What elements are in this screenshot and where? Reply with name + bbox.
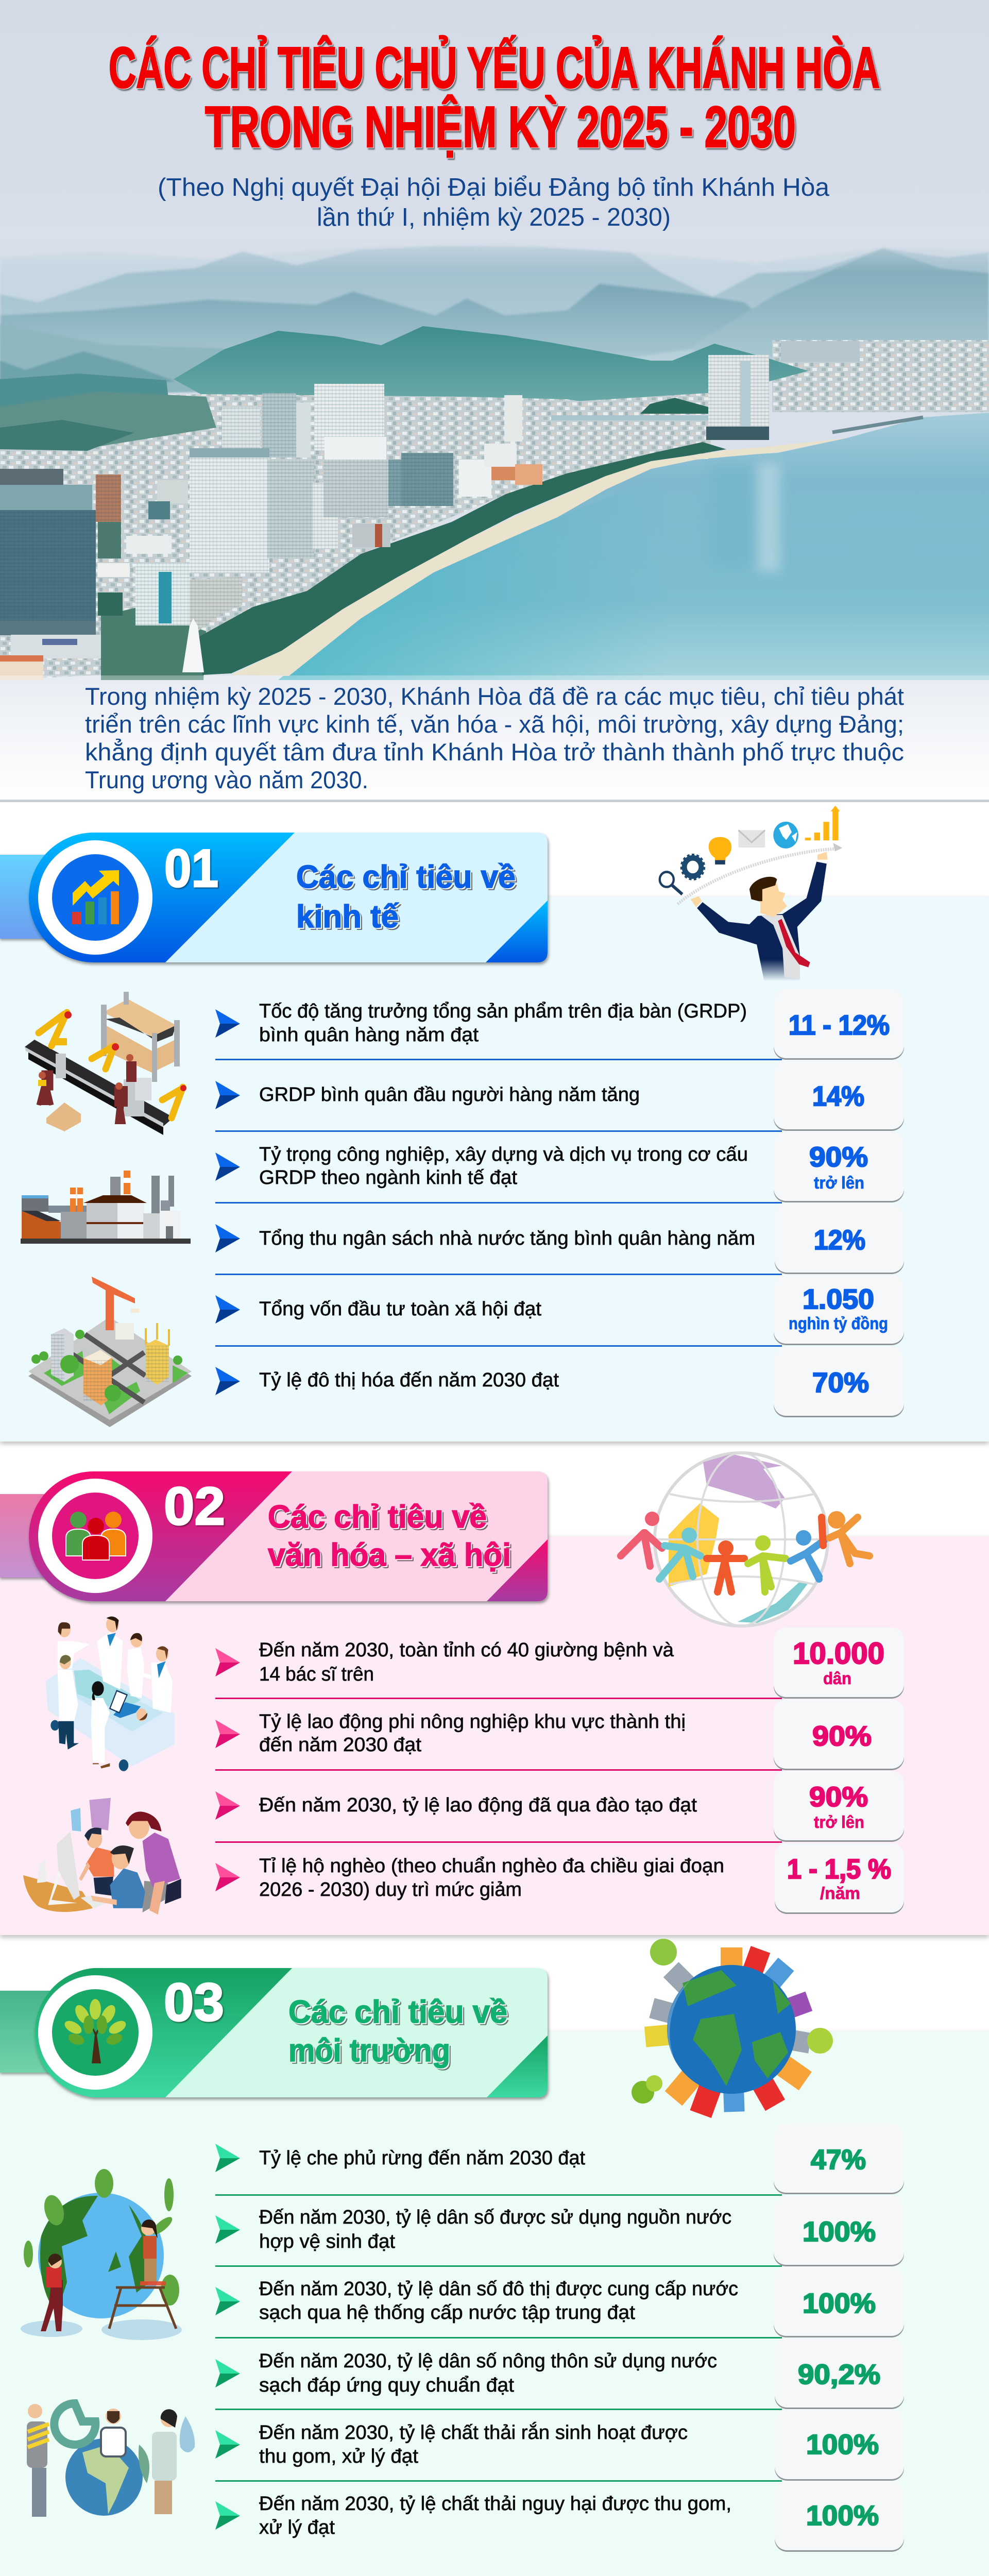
row 2 bbox=[215, 2195, 904, 2266]
row 1: Đến năm 2030, toàn tỉnh có 40 giường bệnh và bbox=[259, 1639, 674, 1661]
row 2: GRDP bình quân đầu người hàng năm tăng bbox=[259, 1084, 640, 1106]
row 6: xử lý đạt bbox=[259, 2517, 335, 2538]
row 4: 12% bbox=[814, 1225, 865, 1256]
row 1: dân bbox=[823, 1669, 851, 1688]
illustration: people around globe bbox=[621, 1453, 869, 1626]
row 2: Đến năm 2030, tỷ lệ dân số được sử dụng nguồn nước bbox=[259, 2207, 731, 2228]
section 1 heading: kinh tế bbox=[296, 899, 399, 935]
illustration: planet ringed by buildings bbox=[632, 1939, 833, 2118]
row 2: 14% bbox=[812, 1081, 864, 1112]
row 5 bbox=[215, 2410, 904, 2481]
row 1: bình quân hàng năm đạt bbox=[259, 1024, 479, 1046]
intro paragraph: khẳng định quyết tâm đưa tỉnh Khánh Hòa trở thành thành phố trực thuộc bbox=[85, 738, 904, 766]
row 2: đến năm 2030 đạt bbox=[259, 1734, 421, 1756]
section 3 banner bbox=[0, 1968, 548, 2097]
illustration: children tending Earth bbox=[21, 2169, 182, 2340]
section 1 heading bbox=[296, 859, 516, 935]
section number 03: 03 bbox=[164, 1973, 224, 2032]
illustration: robot assembly line bbox=[25, 992, 186, 1135]
subtitle: (Theo Nghị quyết Đại hội Đại biểu Đảng bộ tỉnh Khánh Hòa bbox=[158, 174, 830, 201]
row 1: Tốc độ tăng trưởng tổng sản phẩm trên địa bàn (GRDP) bbox=[259, 1001, 747, 1022]
row 6: 70% bbox=[812, 1367, 869, 1398]
row 6: Đến năm 2030, tỷ lệ chất thải nguy hại được thu gom, bbox=[259, 2493, 731, 2515]
row 5: nghìn tỷ đồng bbox=[789, 1314, 888, 1333]
row 5: Đến năm 2030, tỷ lệ chất thải rắn sinh hoạt được bbox=[259, 2421, 688, 2444]
intro paragraph bbox=[85, 683, 904, 793]
row 3: 100% bbox=[803, 2288, 876, 2319]
section 2 heading: văn hóa – xã hội bbox=[268, 1537, 511, 1573]
section 1 banner bbox=[0, 833, 548, 962]
icon: growth chart bbox=[72, 870, 119, 924]
row 1: 11 - 12% bbox=[789, 1010, 890, 1041]
panel: section 1 background bbox=[0, 897, 989, 1442]
row 3: sạch qua hệ thống cấp nước tập trung đạt bbox=[259, 2302, 635, 2324]
row 3: Đến năm 2030, tỷ lệ lao động đã qua đào tạo đạt bbox=[259, 1794, 697, 1816]
section 2 heading bbox=[268, 1499, 511, 1573]
rows: cultural and social indicators bbox=[215, 1628, 904, 1914]
row 1: Tỷ lệ che phủ rừng đến năm 2030 đạt bbox=[259, 2147, 585, 2169]
row 3 bbox=[215, 2266, 904, 2337]
row 3: trở lên bbox=[814, 1812, 864, 1832]
illustration: team at computer bbox=[23, 1798, 181, 1914]
row 2: 100% bbox=[803, 2216, 876, 2247]
row 4: 1 - 1,5 % bbox=[787, 1854, 891, 1885]
row 4: Tổng thu ngân sách nhà nước tăng bình quân hàng năm bbox=[259, 1228, 755, 1249]
text veil at photo bottom bbox=[0, 675, 989, 802]
row 6 bbox=[215, 1346, 904, 1417]
row 1: 47% bbox=[811, 2144, 866, 2175]
row 2: 90% bbox=[812, 1721, 872, 1752]
intro paragraph: triển trên các lĩnh vực kinh tế, văn hóa - xã hội, môi trường, xây dựng Đảng; bbox=[85, 710, 904, 738]
row 3: trở lên bbox=[814, 1173, 864, 1192]
row 5: thu gom, xử lý đạt bbox=[259, 2446, 418, 2467]
row 3: GRDP theo ngành kinh tế đạt bbox=[259, 1167, 517, 1189]
row 2 bbox=[215, 1060, 904, 1131]
row 5: Tổng vốn đầu tư toàn xã hội đạt bbox=[259, 1298, 541, 1320]
row 4 bbox=[215, 1843, 904, 1914]
photo: Nha Trang coastline bbox=[0, 243, 989, 680]
intro paragraph: Trong nhiệm kỳ 2025 - 2030, Khánh Hòa đã đề ra các mục tiêu, chỉ tiêu phát bbox=[85, 683, 904, 710]
distant city bbox=[772, 340, 989, 412]
row 3: Tỷ trọng công nghiệp, xây dựng và dịch vụ trong cơ cấu bbox=[259, 1144, 748, 1165]
row 4: 2026 - 2030) duy trì mức giảm bbox=[259, 1879, 522, 1901]
section number 01: 01 bbox=[164, 839, 218, 899]
row 5: 1.050 bbox=[803, 1284, 874, 1315]
icon: tree bbox=[62, 1999, 128, 2063]
title bbox=[109, 36, 880, 159]
row 2 bbox=[215, 1699, 904, 1770]
row 5 bbox=[215, 1274, 904, 1345]
illustration: businessman with icons bbox=[660, 806, 842, 981]
section 3 heading: Các chỉ tiêu về bbox=[288, 1994, 507, 2030]
sky haze over mountains bbox=[0, 227, 989, 273]
illustration: people with Earth and recycling bbox=[27, 2403, 195, 2517]
panel: header with coastal photo bbox=[0, 0, 989, 802]
city towers bbox=[0, 355, 769, 680]
row 4: 90,2% bbox=[798, 2359, 880, 2390]
row 3 bbox=[215, 1131, 904, 1202]
row 2: hợp vệ sinh đạt bbox=[259, 2231, 395, 2252]
row 1: 10.000 bbox=[793, 1637, 884, 1670]
panel: section 2 background bbox=[0, 1536, 989, 1935]
row 2: Tỷ lệ lao động phi nông nghiệp khu vực thành thị bbox=[259, 1711, 686, 1733]
row 3: 90% bbox=[809, 1142, 868, 1173]
section 2 heading: Các chỉ tiêu về bbox=[268, 1499, 487, 1535]
section 3 heading bbox=[288, 1994, 507, 2069]
row 6 bbox=[215, 2481, 904, 2552]
illustration: city construction site bbox=[28, 1277, 192, 1427]
section 2 banner bbox=[0, 1471, 548, 1601]
row 4: sạch đáp ứng quy chuẩn đạt bbox=[259, 2375, 514, 2396]
rows: environment indicators bbox=[215, 2123, 904, 2552]
row 5: 100% bbox=[806, 2429, 879, 2460]
sand and palm belt bbox=[199, 442, 726, 675]
city ground bbox=[0, 394, 711, 680]
section 1 heading: Các chỉ tiêu về bbox=[296, 859, 516, 895]
panel: section 3 background bbox=[0, 2031, 989, 2576]
row 4: Đến năm 2030, tỷ lệ dân số nông thôn sử dụng nước bbox=[259, 2350, 717, 2372]
illustration: industrial plant bbox=[21, 1171, 191, 1244]
illustration: doctors around bed bbox=[45, 1617, 174, 1771]
row 6: Tỷ lệ đô thị hóa đến năm 2030 đạt bbox=[259, 1369, 559, 1391]
row 6: 100% bbox=[806, 2500, 879, 2531]
row 3: 90% bbox=[809, 1782, 868, 1812]
row 4: Tỉ lệ hộ nghèo (theo chuẩn nghèo đa chiều giai đoạn bbox=[259, 1855, 724, 1877]
row 1: 14 bác sĩ trên bbox=[259, 1664, 374, 1685]
icon: group of people bbox=[66, 1512, 126, 1560]
rows: economic indicators bbox=[215, 989, 904, 1417]
section 3 heading: môi trường bbox=[288, 2033, 450, 2069]
row 3: Đến năm 2030, tỷ lệ dân số đô thị được cung cấp nước bbox=[259, 2278, 738, 2300]
intro paragraph: Trung ương vào năm 2030. bbox=[85, 766, 368, 793]
row 1 bbox=[215, 1628, 904, 1699]
row 3 bbox=[215, 1771, 904, 1842]
row 4 bbox=[215, 2338, 904, 2409]
row 4 bbox=[215, 1203, 904, 1274]
row 1 bbox=[215, 989, 904, 1060]
row 1 bbox=[215, 2123, 904, 2194]
subtitle bbox=[158, 174, 830, 231]
subtitle: lần thứ I, nhiệm kỳ 2025 - 2030) bbox=[317, 204, 671, 231]
row 4: /năm bbox=[820, 1884, 860, 1903]
sea bbox=[278, 413, 989, 680]
section number 02: 02 bbox=[164, 1477, 225, 1536]
